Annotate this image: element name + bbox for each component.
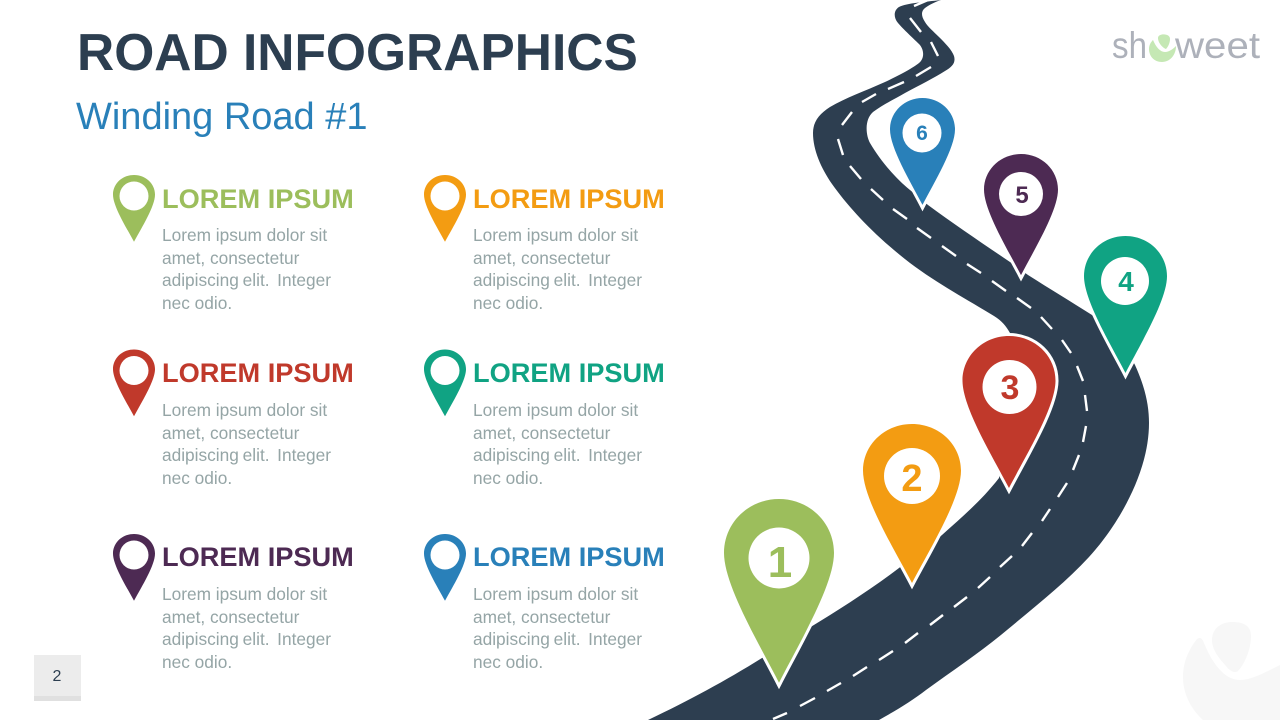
legend item 6: adipiscing elit. Integer (473, 629, 642, 649)
map pin 6 (890, 98, 955, 205)
legend item 3: amet, consectetur (162, 423, 300, 443)
map pin 5: 5 (1015, 182, 1029, 209)
showeet logo: weet (1174, 25, 1261, 66)
legend item 1: Lorem ipsum dolor sit (162, 225, 327, 245)
legend item 6: LOREM IPSUM (473, 541, 665, 572)
legend item 5: Lorem ipsum dolor sit (162, 584, 327, 604)
legend item 5 (113, 534, 354, 672)
legend item 3: nec odio. (162, 468, 232, 488)
legend item 2: adipiscing elit. Integer (473, 270, 642, 290)
legend item 1: LOREM IPSUM (162, 183, 354, 214)
subtitle: Winding Road #1 (76, 96, 368, 138)
legend item 5: LOREM IPSUM (162, 541, 354, 572)
legend item 4: nec odio. (473, 468, 543, 488)
showeet logo (1112, 25, 1261, 66)
legend item 1 (113, 175, 354, 313)
legend item 4: amet, consectetur (473, 423, 611, 443)
legend item 4: adipiscing elit. Integer (473, 445, 642, 465)
legend item 3: adipiscing elit. Integer (162, 445, 331, 465)
map pin 3 (962, 336, 1056, 488)
watermark logo (1183, 622, 1280, 720)
showeet logo: sh (1112, 25, 1147, 66)
legend item 6: amet, consectetur (473, 607, 611, 627)
map pin 3: 3 (1001, 369, 1019, 407)
legend item 5: nec odio. (162, 652, 232, 672)
road centre dashes (773, 0, 1087, 719)
map pin 1 (724, 499, 834, 683)
legend item 4: Lorem ipsum dolor sit (473, 400, 638, 420)
page number box (34, 655, 81, 701)
legend item 4 (424, 350, 665, 488)
map pin 6: 6 (916, 122, 928, 145)
legend item 2: nec odio. (473, 293, 543, 313)
legend item 2: Lorem ipsum dolor sit (473, 225, 638, 245)
winding road (648, 0, 1149, 720)
legend item 6: Lorem ipsum dolor sit (473, 584, 638, 604)
legend item 5: amet, consectetur (162, 607, 300, 627)
legend item 3 (113, 350, 354, 488)
map pin 2: 2 (901, 458, 923, 500)
legend item 4: LOREM IPSUM (473, 357, 665, 388)
title: ROAD INFOGRAPHICS (77, 23, 638, 81)
page number box: 2 (53, 668, 62, 685)
map pin 2 (863, 424, 961, 583)
legend item 2 (424, 175, 665, 313)
legend item 6: nec odio. (473, 652, 543, 672)
legend item 1: nec odio. (162, 293, 232, 313)
legend item 2: amet, consectetur (473, 248, 611, 268)
legend item 1: adipiscing elit. Integer (162, 270, 331, 290)
legend item 1: amet, consectetur (162, 248, 300, 268)
legend item 3: Lorem ipsum dolor sit (162, 400, 327, 420)
map pin 4 (1084, 236, 1167, 373)
legend item 2: LOREM IPSUM (473, 183, 665, 214)
legend item 3: LOREM IPSUM (162, 357, 354, 388)
map pin 1: 1 (768, 538, 792, 587)
map pin 4: 4 (1118, 266, 1134, 297)
legend item 5: adipiscing elit. Integer (162, 629, 331, 649)
map pin 5 (984, 154, 1058, 275)
legend item 6 (424, 534, 665, 672)
